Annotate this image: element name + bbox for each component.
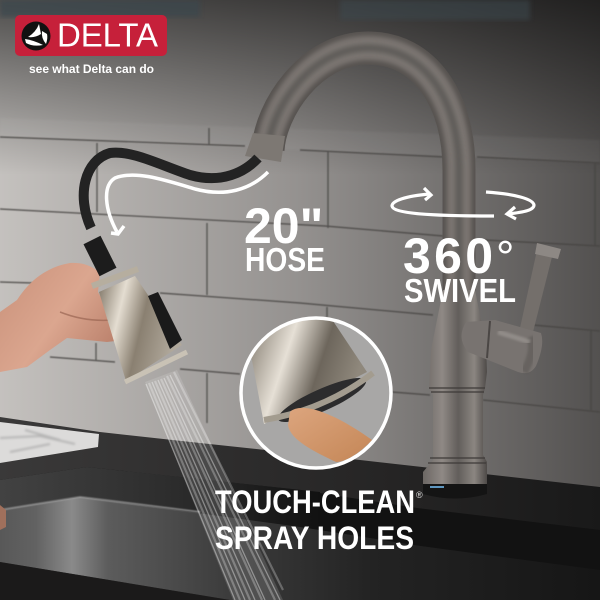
marble board: [0, 422, 99, 463]
spout arch: [245, 48, 459, 300]
nozzle close-up: [252, 320, 367, 424]
hand holding spray head: [0, 263, 130, 372]
label: touch-clean spray holes: SPRAY HOLES: [215, 520, 414, 556]
water spray: [145, 370, 283, 600]
label: 360 swivel: °: [496, 231, 514, 283]
pull-down spray head: [92, 269, 187, 382]
logo: Delta badge: [15, 15, 167, 56]
logo: Delta badge: DELTA: [57, 16, 158, 54]
label: 20 inch hose: HOSE: [245, 241, 325, 278]
label: 20 inch hose: [244, 198, 325, 278]
label: 360 swivel: 360: [403, 228, 493, 284]
label: 20 inch hose: 20": [244, 198, 323, 254]
finger: [288, 408, 372, 462]
label: touch-clean spray holes: [215, 484, 423, 556]
label: 360 swivel: SWIVEL: [404, 272, 516, 309]
black base: [423, 484, 487, 498]
inset circle: touch-clean spray holes: [241, 312, 391, 468]
tagline: see what Delta can do: [29, 62, 154, 76]
arrows: 360 swivel: [392, 188, 534, 219]
countertop and sink: [0, 417, 600, 600]
handle cylinder: [461, 320, 542, 373]
lever stem: [520, 250, 553, 332]
faucet: arched spout, body and handle: [245, 48, 561, 498]
arrow: hose reach: [107, 172, 268, 234]
faucet body: [423, 290, 487, 485]
label: touch-clean spray holes: ®: [416, 490, 423, 500]
label: 360 swivel: [403, 228, 516, 309]
label: touch-clean spray holes: TOUCH-CLEAN: [215, 484, 415, 520]
black braided hose: [84, 153, 258, 272]
